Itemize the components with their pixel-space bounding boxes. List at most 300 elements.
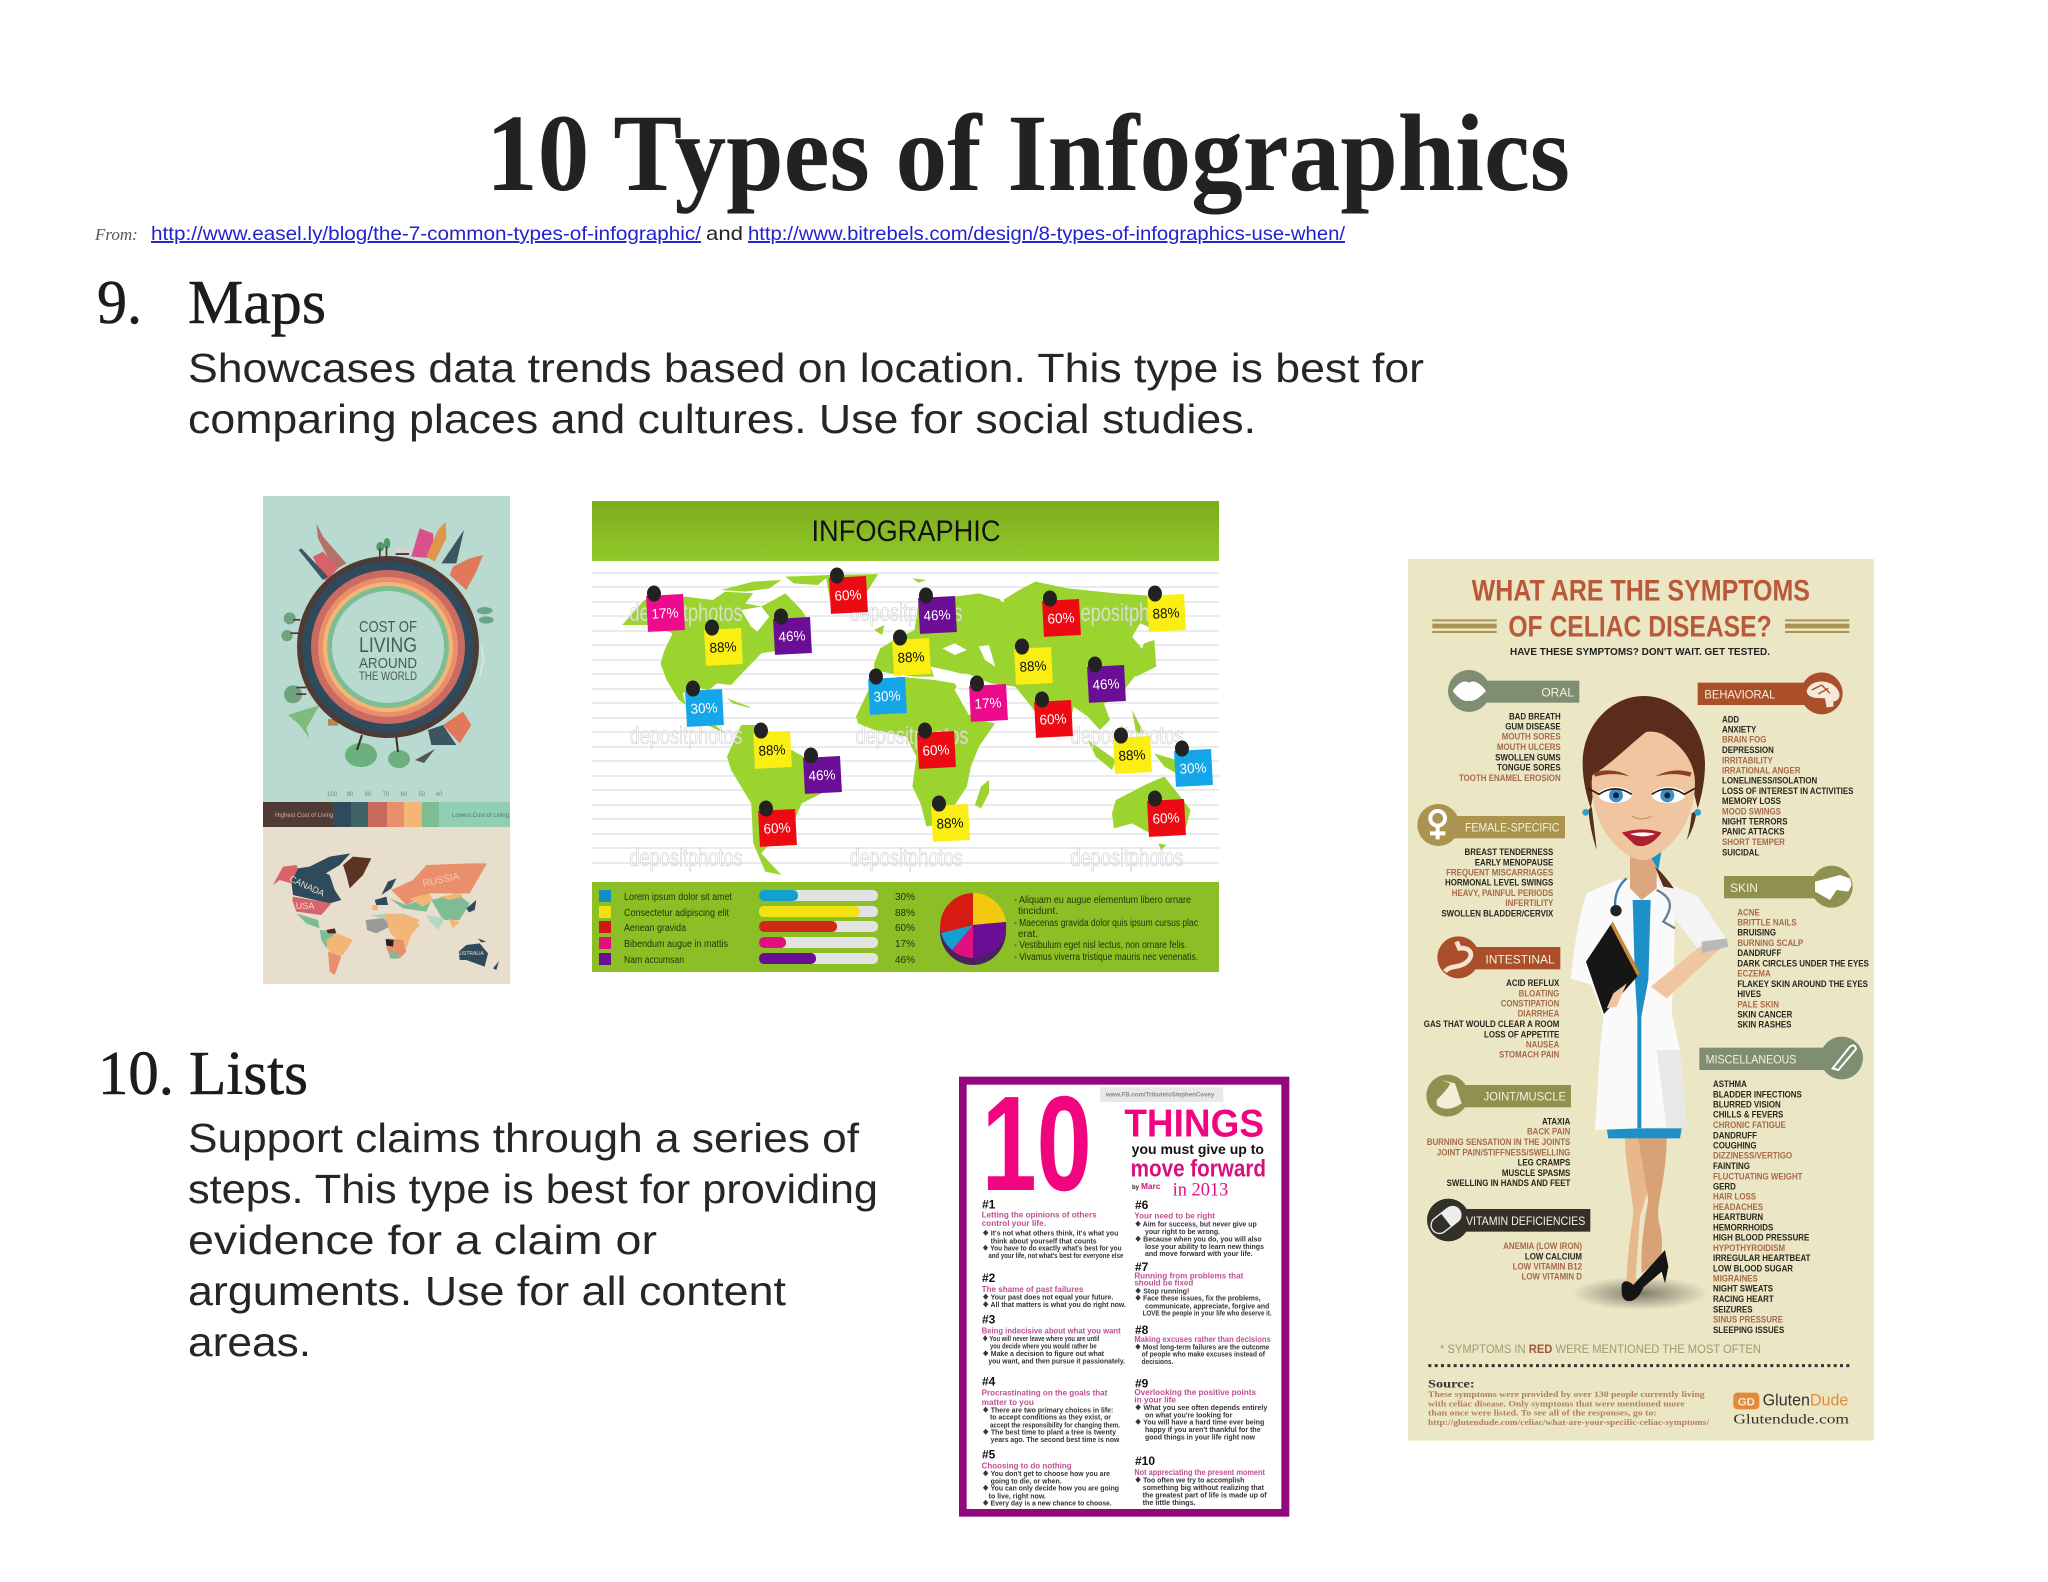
item 9: Overlooking the positive points — [1134, 1387, 1256, 1397]
symptoms: vitamin deficiencies: LOW CALCIUM — [1525, 1251, 1582, 1261]
footer body text — [1014, 895, 1198, 963]
symptoms: skin: FLAKEY SKIN AROUND THE EYES — [1737, 979, 1868, 989]
item 9: on what you're looking for — [1145, 1410, 1232, 1419]
symptoms: oral — [1459, 711, 1561, 783]
pinned percentage notes: 30% — [1179, 759, 1207, 777]
symptoms: miscellaneous: MIGRAINES — [1713, 1273, 1758, 1284]
heading: OF CELIAC DISEASE? — [1508, 611, 1772, 644]
symptoms: intestinal: NAUSEA — [1526, 1039, 1559, 1050]
symptoms: vitamin deficiencies: LOW VITAMIN D — [1521, 1271, 1582, 1282]
banner: female-specific — [1417, 804, 1565, 846]
item 3: Being indecisive about what you want — [982, 1326, 1121, 1336]
symptoms: miscellaneous: BLADDER INFECTIONS — [1713, 1089, 1802, 1099]
text block: lists description: areas. — [188, 1319, 311, 1365]
symptoms: behavioral — [1722, 714, 1854, 857]
symptoms: miscellaneous: FLUCTUATING WEIGHT — [1713, 1171, 1803, 1181]
symptoms: oral: GUM DISEASE — [1505, 721, 1561, 732]
ring chart caption: LIVING — [359, 634, 417, 657]
legend and progress bars: 17% — [895, 939, 915, 950]
item 9: ❖ You will have a hard time ever being — [1135, 1418, 1265, 1427]
item 8: of people who make excuses instead of — [1142, 1350, 1265, 1359]
symptoms: miscellaneous — [1713, 1079, 1811, 1335]
item 7 — [1134, 1260, 1272, 1318]
item 5: to live, right now. — [989, 1491, 1046, 1500]
item 3 — [982, 1312, 1125, 1365]
pinned percentage notes: 88% — [1019, 657, 1047, 675]
scale numbers: 70 — [383, 792, 390, 798]
item 2: #2 — [982, 1271, 996, 1285]
3D pie chart — [940, 893, 1006, 965]
logo: gluten dude — [1733, 1390, 1850, 1426]
symptoms: miscellaneous: SINUS PRESSURE — [1713, 1314, 1783, 1325]
list title: in 2013 — [1173, 1179, 1228, 1200]
watermarks: depositphotos — [630, 844, 742, 872]
scale numbers: 80 — [365, 792, 372, 798]
pinned percentage notes: 17% — [651, 604, 679, 622]
symptoms: skin: BRITTLE NAILS — [1737, 917, 1797, 928]
item 2: ❖ All that matters is what you do right now. — [983, 1300, 1126, 1309]
symptoms: miscellaneous: LOW BLOOD SUGAR — [1713, 1263, 1793, 1273]
footer body text: - Vivamus viverra tristique mauris nec venenatis. — [1014, 952, 1198, 963]
item 7: should be fixed — [1134, 1278, 1193, 1288]
symptoms: miscellaneous: HEADACHES — [1713, 1202, 1763, 1212]
symptoms: skin — [1737, 907, 1869, 1030]
heading: 9. Maps — [97, 269, 326, 337]
symptoms: miscellaneous: CHILLS & FEVERS — [1713, 1109, 1784, 1120]
item 10: ❖ Too often we try to accomplish — [1135, 1476, 1245, 1485]
pinned percentage notes: 60% — [1152, 809, 1180, 827]
legend and progress bars: Lorem ipsum dolor sit amet — [624, 892, 732, 903]
item 6: and move forward with your life. — [1145, 1249, 1253, 1258]
symptoms: female-specific: HEAVY, PAINFUL PERIODS — [1452, 888, 1554, 898]
watermarks: depositphotos — [630, 599, 742, 627]
symptoms: female-specific: SWOLLEN BLADDER/CERVIX — [1441, 908, 1554, 918]
item 6: ❖ Because when you do, you will also — [1135, 1234, 1262, 1243]
symptoms: miscellaneous: IRREGULAR HEARTBEAT — [1713, 1252, 1811, 1263]
text block: lists description: Support claims through a series of — [188, 1115, 860, 1161]
symptoms: skin: SKIN CANCER — [1737, 1009, 1792, 1020]
heading: WHAT ARE THE SYMPTOMS — [1472, 575, 1810, 608]
item 1: Letting the opinions of others — [982, 1210, 1097, 1220]
text block: lists description: arguments. Use for all content — [188, 1268, 787, 1314]
pinned percentage notes: 88% — [709, 638, 737, 656]
list title: THINGS — [1124, 1102, 1264, 1146]
symptoms: skin: ECZEMA — [1737, 968, 1771, 979]
banner: miscellaneous — [1699, 1037, 1863, 1079]
colour-coded world map: RUSSIA — [422, 871, 461, 890]
trees under the globe — [345, 735, 435, 768]
text block: maps description: Showcases data trends based on location. This type is best for — [188, 345, 1424, 391]
symptoms: behavioral: ADD — [1722, 714, 1739, 724]
symptoms: female-specific: INFERTILITY — [1505, 898, 1554, 908]
symptoms: miscellaneous: COUGHING — [1713, 1140, 1757, 1150]
symptoms: behavioral: BRAIN FOG — [1722, 734, 1767, 745]
item 5: ❖ Every day is a new chance to choose. — [983, 1499, 1112, 1508]
pinned percentage notes: 60% — [1047, 609, 1075, 627]
item 7: communicate, appreciate, forgive and — [1145, 1301, 1270, 1310]
banner: vitamin deficiencies — [1427, 1199, 1590, 1241]
symptoms: female-specific — [1441, 847, 1554, 918]
item 6: ❖ Aim for success, but never give up — [1135, 1220, 1257, 1229]
footer body text: erat. — [1018, 929, 1038, 940]
heading: HAVE THESE SYMPTOMS? DON'T WAIT. GET TESTED. — [1510, 647, 1770, 658]
symptoms: intestinal — [1424, 978, 1560, 1060]
item 6: #6 — [1135, 1198, 1149, 1212]
list title — [1124, 1102, 1266, 1200]
source note: Source: — [1428, 1376, 1475, 1390]
legend and progress bars: 60% — [895, 923, 915, 934]
title: 10 Types of Infographics — [486, 92, 1570, 214]
symptoms: miscellaneous: CHRONIC FATIGUE — [1713, 1120, 1786, 1130]
symptoms: behavioral: DEPRESSION — [1722, 745, 1774, 755]
logo: gluten dude: GD — [1738, 1396, 1755, 1408]
pinned percentage notes: 17% — [974, 694, 1002, 712]
legend and progress bars: Aenean gravida — [624, 923, 686, 934]
legend and progress bars: Bibendum augue in mattis — [624, 939, 728, 950]
watermarks: depositphotos — [856, 722, 968, 750]
panel: 10 things list infographic — [959, 1068, 1289, 1517]
symptoms: behavioral: LONELINESS/ISOLATION — [1722, 775, 1817, 786]
item 5: going to die, or when. — [991, 1476, 1062, 1485]
pinned percentage notes: 60% — [1039, 710, 1067, 728]
concentric ring chart — [297, 556, 479, 738]
text block: lists description: steps. This type is best for providing — [188, 1166, 878, 1212]
source note — [1428, 1376, 1710, 1427]
pinned percentage notes: 46% — [808, 766, 836, 784]
doctor illustration — [1571, 696, 1728, 1310]
source line: http://www.bitrebels.com/design/8-types-of-infographics-use-when/ — [748, 223, 1346, 245]
heading: 10. Lists — [98, 1040, 308, 1108]
symptoms: skin: DANDRUFF — [1737, 948, 1781, 958]
scale numbers — [327, 792, 443, 798]
ring chart caption — [359, 619, 417, 683]
pinned percentage notes: 60% — [834, 586, 862, 604]
symptoms: skin: ACNE — [1737, 907, 1760, 917]
text block: lists description: evidence for a claim or — [188, 1217, 657, 1263]
symptoms: joint/muscle: SWELLING IN HANDS AND FEET — [1447, 1178, 1571, 1188]
symptoms: miscellaneous: HEMORRHOIDS — [1713, 1222, 1774, 1232]
colour-coded world map: CANADA — [288, 874, 326, 898]
pinned percentage notes: 88% — [1152, 604, 1180, 622]
colour legend band: Lowest Cost of Living — [452, 813, 509, 819]
item 8: ❖ Most long-term failures are the outcome — [1135, 1342, 1269, 1351]
symptoms: behavioral: ANXIETY — [1722, 724, 1757, 734]
watermarks: depositphotos — [1070, 722, 1184, 750]
pinned percentage notes: 60% — [922, 741, 950, 759]
banner: skin: SKIN — [1730, 881, 1758, 895]
item 1: ❖ You have to do exactly what's best for you — [983, 1244, 1122, 1253]
heading: 10. Lists: 10. — [98, 1040, 174, 1108]
item 4: years ago. The second best time is now — [991, 1435, 1119, 1444]
header title: INFOGRAPHIC — [812, 515, 1000, 548]
pinned percentage notes: 88% — [758, 741, 786, 759]
pinned percentage notes: 46% — [778, 627, 806, 645]
item 3: ❖ Make a decision to figure out what — [983, 1349, 1104, 1358]
symptoms: oral: MOUTH SORES — [1502, 731, 1561, 742]
text block: lists description — [188, 1115, 878, 1365]
scale numbers: 60 — [401, 792, 408, 798]
heading: 10. Lists: Lists — [189, 1040, 308, 1108]
symptoms: intestinal: CONSTIPATION — [1501, 998, 1559, 1008]
source line — [94, 223, 1346, 245]
symptoms: skin: BRUISING — [1737, 927, 1776, 938]
symptoms: vitamin deficiencies — [1503, 1240, 1582, 1282]
item 6: your right to be wrong. — [1145, 1227, 1220, 1236]
item 8: Making excuses rather than decisions — [1134, 1334, 1271, 1344]
symptoms: miscellaneous: HEARTBURN — [1713, 1211, 1763, 1222]
symptoms: female-specific: BREAST TENDERNESS — [1465, 847, 1554, 857]
pinned percentage notes: 88% — [897, 648, 925, 666]
symptoms: miscellaneous: DANDRUFF — [1713, 1130, 1757, 1140]
item 8: decisions. — [1142, 1357, 1173, 1366]
symptoms: miscellaneous: BLURRED VISION — [1713, 1099, 1781, 1109]
item 6: lose your ability to learn new things — [1145, 1242, 1264, 1251]
symptoms: miscellaneous: FAINTING — [1713, 1161, 1750, 1171]
symptoms: skin: DARK CIRCLES UNDER THE EYES — [1737, 958, 1869, 968]
symptoms: behavioral: SUICIDAL — [1722, 847, 1759, 857]
banner: female-specific: FEMALE-SPECIFIC — [1465, 821, 1560, 835]
item 4: ❖ The best time to plant a tree is twenty — [983, 1428, 1117, 1437]
symptoms: oral: BAD BREATH — [1509, 711, 1561, 721]
source line: and — [706, 223, 743, 245]
item 5: Choosing to do nothing — [982, 1460, 1072, 1470]
logo: gluten dude: GlutenDude — [1763, 1390, 1848, 1409]
legend and progress bars: 30% — [895, 892, 915, 903]
footer body text: - Aliquam eu augue elementum libero ornare — [1014, 895, 1191, 906]
footer band — [592, 882, 1219, 972]
list title: Marc — [1141, 1181, 1161, 1191]
symptoms: female-specific: HORMONAL LEVEL SWINGS — [1445, 877, 1554, 888]
colour-coded world map — [273, 853, 499, 975]
item 10: #10 — [1135, 1454, 1155, 1468]
item 7: #7 — [1135, 1260, 1149, 1274]
symptoms: vitamin deficiencies: ANEMIA (LOW IRON) — [1503, 1240, 1582, 1251]
pinned percentage notes: 30% — [690, 699, 718, 717]
banner: vitamin deficiencies: VITAMIN DEFICIENCIES — [1466, 1214, 1585, 1228]
item 3: #3 — [982, 1312, 996, 1326]
ring chart caption: THE WORLD — [359, 669, 417, 683]
pinned percentage notes: 46% — [923, 606, 951, 624]
big number 10: 10 — [982, 1068, 1092, 1219]
header band — [592, 501, 1219, 561]
symptoms: miscellaneous: SEIZURES — [1713, 1304, 1753, 1314]
heading — [1432, 575, 1849, 658]
symptoms: behavioral: PANIC ATTACKS — [1722, 826, 1785, 837]
item 3: ❖ You will never leave where you are until — [983, 1334, 1099, 1343]
item 9: good things in your life right now — [1145, 1432, 1255, 1441]
watermarks: depositphotos — [1070, 599, 1184, 627]
banner: intestinal — [1437, 936, 1560, 978]
item 10: Not appreciating the present moment — [1134, 1467, 1265, 1477]
symptoms: joint/muscle: ATAXIA — [1542, 1116, 1570, 1126]
list title: by — [1132, 1185, 1140, 1191]
symptoms: skin: PALE SKIN — [1737, 999, 1779, 1009]
item 4: matter to you — [982, 1397, 1034, 1407]
symptoms: miscellaneous: HYPOTHYROIDISM — [1713, 1242, 1785, 1253]
text block: maps description — [188, 345, 1424, 442]
item 4: to accept conditions as they exist, or — [990, 1413, 1111, 1422]
colour legend band: Highest Cost of Living — [275, 813, 333, 819]
symptoms: behavioral: MOOD SWINGS — [1722, 806, 1781, 816]
item 4: accept the responsibility for changing them. — [990, 1420, 1120, 1429]
landmarks around the globe — [281, 522, 494, 745]
symptoms: joint/muscle: BACK PAIN — [1527, 1126, 1570, 1137]
item 9 — [1134, 1376, 1268, 1441]
scale numbers: 40 — [436, 792, 443, 798]
list title: you must give up to — [1132, 1141, 1264, 1157]
item 9: in your life — [1134, 1394, 1176, 1404]
symptoms: miscellaneous: GERD — [1713, 1181, 1736, 1191]
footer body text: tincidunt. — [1018, 906, 1058, 917]
symptoms: vitamin deficiencies: LOW VITAMIN B12 — [1513, 1261, 1582, 1272]
symptoms: intestinal: DIARRHEA — [1518, 1008, 1559, 1019]
item 7: ❖ Face these issues, fix the problems, — [1135, 1294, 1261, 1303]
heading: 9. Maps: 9. — [97, 269, 142, 337]
watermarks: depositphotos — [1070, 844, 1184, 872]
symptoms: joint/muscle — [1427, 1116, 1571, 1188]
item 8: #8 — [1135, 1323, 1149, 1337]
symptoms: oral: MOUTH ULCERS — [1497, 742, 1561, 752]
symptoms: oral: TONGUE SORES — [1497, 762, 1561, 773]
banner: oral: ORAL — [1541, 685, 1574, 699]
symptoms: female-specific: EARLY MENOPAUSE — [1475, 857, 1554, 867]
symptoms: behavioral: NIGHT TERRORS — [1722, 816, 1788, 827]
item 2: ❖ Your past does not equal your future. — [983, 1293, 1113, 1302]
symptoms: intestinal: BLOATING — [1519, 988, 1560, 998]
symptoms: joint/muscle: LEG CRAMPS — [1518, 1157, 1571, 1168]
heading: 9. Maps: Maps — [188, 269, 326, 337]
item 1: #1 — [982, 1198, 996, 1212]
symptoms: skin: HIVES — [1737, 989, 1761, 999]
symptoms: miscellaneous: HIGH BLOOD PRESSURE — [1713, 1232, 1810, 1243]
scale numbers: 50 — [419, 792, 426, 798]
symptoms: behavioral: LOSS OF INTEREST IN ACTIVITIES — [1722, 786, 1854, 796]
watermarks: depositphotos — [850, 599, 962, 627]
source note: http://glutendude.com/celiac/what-are-your-specific-celiac-symptoms/ — [1428, 1418, 1710, 1427]
symptoms: intestinal: ACID REFLUX — [1506, 978, 1560, 988]
source line: http://www.easel.ly/blog/the-7-common-types-of-infographic/ — [151, 223, 702, 245]
symptoms: skin: SKIN RASHES — [1737, 1019, 1792, 1030]
item 8 — [1134, 1323, 1271, 1366]
symptoms: joint/muscle: BURNING SENSATION IN THE JOINTS — [1427, 1137, 1571, 1147]
footer body text: - Vestibulum eget nisl lectus, non ornare felis. — [1014, 940, 1187, 951]
symptoms: intestinal: LOSS OF APPETITE — [1484, 1029, 1560, 1039]
symptoms: intestinal: GAS THAT WOULD CLEAR A ROOM — [1424, 1019, 1559, 1029]
watermarks: depositphotos — [850, 844, 962, 872]
item 5: ❖ You don't get to choose how you are — [983, 1469, 1110, 1478]
symptoms: behavioral: SHORT TEMPER — [1722, 837, 1785, 847]
ribbon — [1100, 1087, 1223, 1102]
item 5: ❖ You can only decide how you are going — [983, 1484, 1119, 1493]
background stripes — [592, 573, 1219, 863]
banner: behavioral: BEHAVIORAL — [1704, 687, 1776, 701]
item 1: control your life. — [982, 1218, 1046, 1228]
pinned percentage notes: 30% — [873, 687, 901, 705]
symptoms: oral: TOOTH ENAMEL EROSION — [1459, 773, 1561, 783]
legend and progress bars: Nam accumsan — [624, 955, 684, 966]
banner: skin — [1724, 866, 1853, 908]
legend and progress bars: 88% — [895, 908, 915, 919]
list title: move forward — [1131, 1156, 1266, 1183]
symptoms: miscellaneous: ASTHMA — [1713, 1079, 1747, 1089]
symptoms: behavioral: MEMORY LOSS — [1722, 796, 1781, 806]
panel: cost of living infographic — [263, 496, 510, 984]
source note: These symptoms were provided by over 130 people currently living — [1428, 1390, 1706, 1399]
footnote: * SYMPTOMS IN RED WERE MENTIONED THE MOST OFTEN — [1440, 1343, 1761, 1356]
symptoms: female-specific: FREQUENT MISCARRIAGES — [1446, 867, 1554, 877]
banner: joint/muscle — [1426, 1075, 1571, 1117]
panel: celiac disease symptoms infographic — [1408, 559, 1874, 1441]
colour-coded world map: AUSTRALIA — [456, 951, 485, 957]
banner: intestinal: INTESTINAL — [1485, 952, 1555, 966]
item 5: #5 — [982, 1448, 996, 1462]
item 2: The shame of past failures — [982, 1284, 1084, 1294]
item 4 — [982, 1375, 1120, 1444]
pinned percentage notes: 88% — [1118, 746, 1146, 764]
symptoms: miscellaneous: HAIR LOSS — [1713, 1191, 1756, 1202]
colour-coded world map: USA — [296, 901, 314, 911]
symptoms: miscellaneous: DIZZINESS/VERTIGO — [1713, 1150, 1793, 1161]
banner: miscellaneous: MISCELLANEOUS — [1706, 1052, 1796, 1066]
symptoms: oral: SWOLLEN GUMS — [1495, 752, 1561, 762]
pinned percentage notes: 46% — [1092, 675, 1120, 693]
item 3: you decide where you would rather be — [990, 1342, 1097, 1351]
legend and progress bars — [599, 890, 915, 966]
symptoms: miscellaneous: RACING HEART — [1713, 1293, 1774, 1304]
item 10: something big without realizing that — [1143, 1483, 1264, 1492]
symptoms: skin: BURNING SCALP — [1737, 938, 1804, 948]
ring chart caption: COST OF — [359, 619, 417, 636]
item 7: Running from problems that — [1134, 1270, 1244, 1280]
item 10: the greatest part of life is made up of — [1143, 1491, 1267, 1500]
item 5 — [982, 1448, 1119, 1508]
item 10: the little things. — [1143, 1498, 1196, 1507]
watermarks: depositphotos — [630, 722, 742, 750]
scale numbers: 100 — [327, 792, 338, 798]
symptoms: joint/muscle: JOINT PAIN/STIFFNESS/SWELLING — [1437, 1147, 1571, 1157]
ring chart caption: AROUND — [359, 655, 417, 672]
banner: oral — [1448, 670, 1579, 712]
item 6: Your need to be right — [1134, 1211, 1215, 1221]
legend and progress bars: Consectetur adipiscing elit — [624, 908, 729, 919]
item 10 — [1134, 1454, 1267, 1507]
item 9: ❖ What you see often depends entirely — [1135, 1403, 1268, 1412]
source note: with celiac disease. Only symptoms that were mentioned more — [1428, 1399, 1685, 1408]
symptoms: joint/muscle: MUSCLE SPASMS — [1502, 1168, 1571, 1178]
symptoms: behavioral: IRRATIONAL ANGER — [1722, 765, 1801, 775]
source note: than once were listed. To see all of the responses, go to: — [1428, 1409, 1657, 1418]
text block: maps description: comparing places and cultures. Use for social studies. — [188, 396, 1256, 442]
item 9: #9 — [1135, 1376, 1149, 1390]
watermarks — [630, 599, 1184, 872]
symptoms: miscellaneous: NIGHT SWEATS — [1713, 1283, 1773, 1294]
symptoms: behavioral: IRRITABILITY — [1722, 755, 1773, 765]
item 4: ❖ There are two primary choices in life: — [983, 1405, 1113, 1414]
item 4: Procrastinating on the goals that — [982, 1387, 1108, 1397]
item 3: you want, and then pursue it passionately. — [988, 1356, 1125, 1365]
logo: gluten dude: Glutendude.com — [1733, 1411, 1850, 1426]
ribbon: www.FB.com/TributetoStephenCovey — [1105, 1091, 1215, 1098]
world map continents — [622, 574, 1191, 875]
legend and progress bars: 46% — [895, 955, 915, 966]
item 1: ❖ It's not what others think, it's what you — [983, 1229, 1119, 1238]
item 2 — [982, 1271, 1126, 1309]
pinned percentage notes: 60% — [763, 819, 791, 837]
banner: behavioral — [1698, 672, 1843, 714]
symptoms: intestinal: STOMACH PAIN — [1499, 1049, 1559, 1060]
item 7: LOVE the people in your life who deserve it. — [1143, 1309, 1272, 1318]
item 1 — [982, 1198, 1123, 1260]
